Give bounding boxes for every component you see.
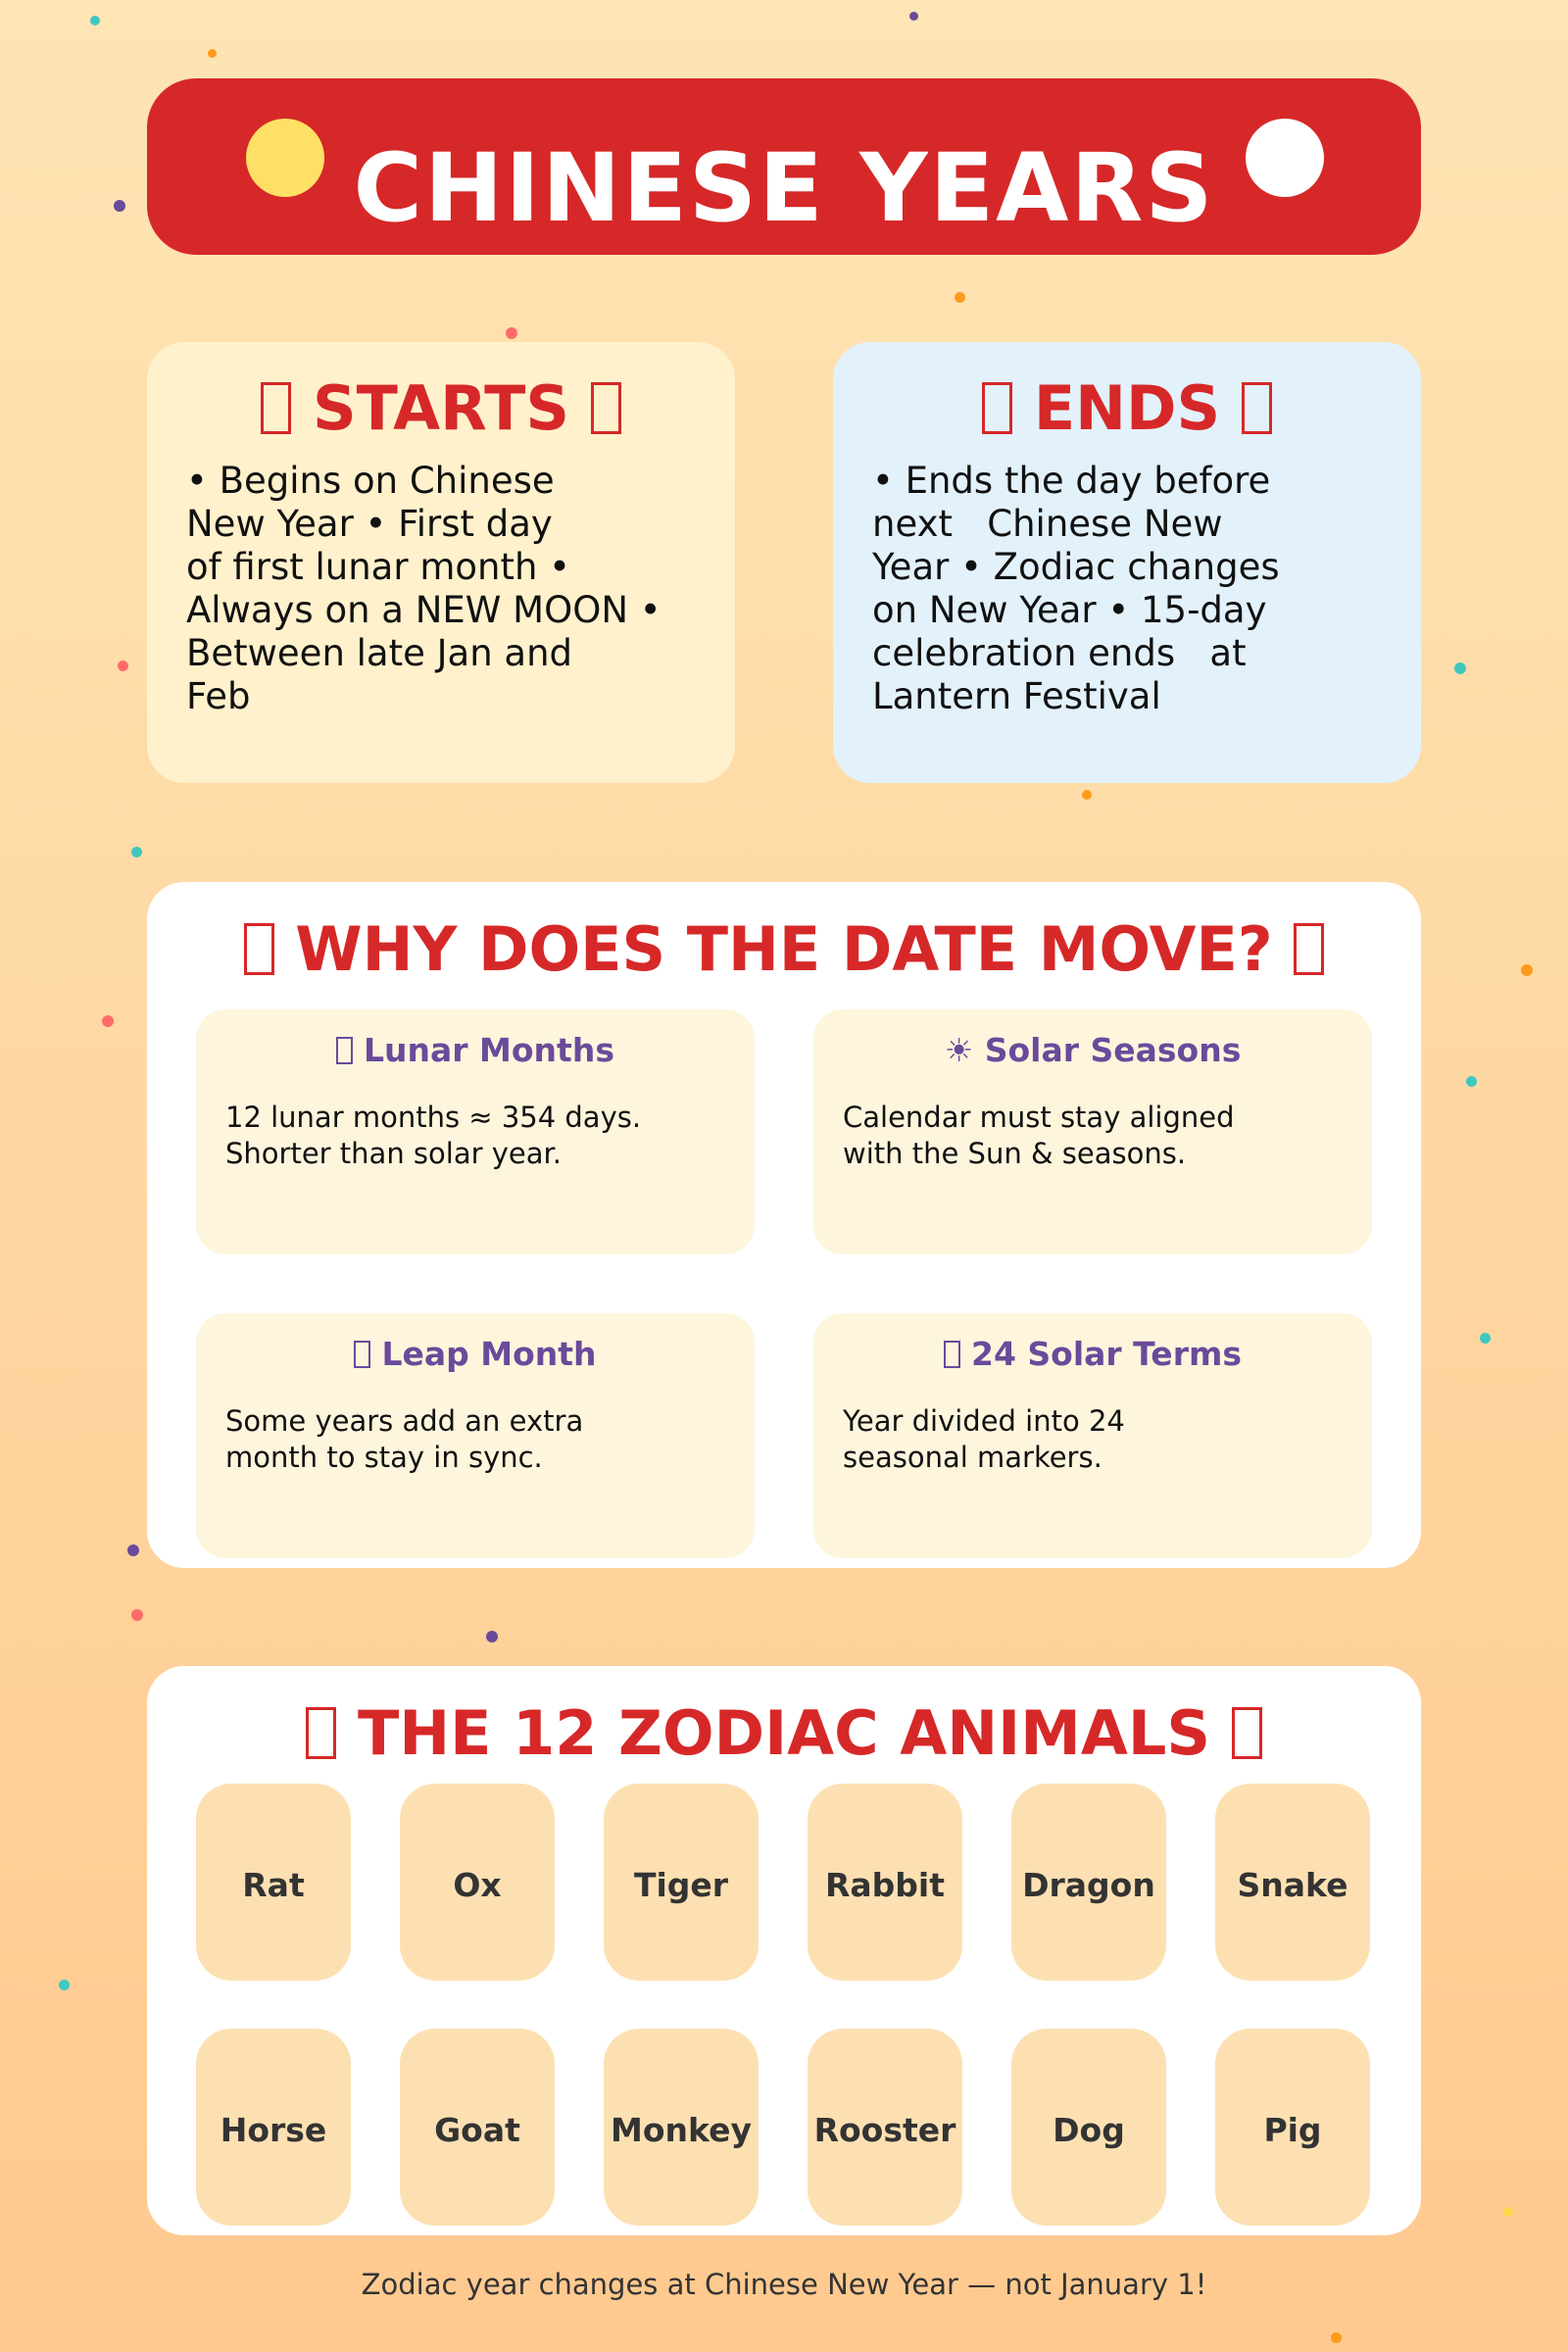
tiles: [196, 1784, 1370, 2226]
text: starts: Always on a NEW MOON •: [186, 589, 662, 631]
panel: zodiac animals: Rooster: [814, 2111, 956, 2149]
panel: zodiac animals: [147, 1666, 1421, 2235]
heading: ends: ENDS: [1034, 372, 1220, 444]
card: lunar months: Shorter than solar year.: [225, 1137, 562, 1170]
title banner: [147, 78, 1421, 255]
card: lunar months: [196, 1009, 755, 1254]
panel: ends: [833, 342, 1421, 783]
panel: zodiac animals: Dragon: [1022, 1866, 1155, 1904]
card: 24 solar terms: 24 Solar Terms: [971, 1335, 1242, 1373]
panel: zodiac animals: Rat: [242, 1866, 305, 1904]
heading: starts: STARTS: [313, 372, 569, 444]
card: 24 solar terms: Year divided into 24: [843, 1404, 1125, 1438]
text: starts: Feb: [186, 675, 251, 717]
panel: zodiac animals: Rabbit: [825, 1866, 945, 1904]
heading: ends: [982, 372, 1272, 444]
panel: zodiac animals: Snake: [1237, 1866, 1348, 1904]
text: starts: Between late Jan and: [186, 632, 572, 674]
text: ends: next Chinese New: [872, 503, 1223, 545]
card: leap month: [196, 1313, 755, 1558]
panel: starts: [147, 342, 735, 783]
text: starts: New Year • First day: [186, 503, 553, 545]
text: ends: on New Year • 15-day: [872, 589, 1266, 631]
text: ends: • Ends the day before: [872, 460, 1270, 502]
text: ends: celebration ends at: [872, 632, 1247, 674]
panel: zodiac animals: Dog: [1053, 2111, 1125, 2149]
panel: zodiac animals: Tiger: [634, 1866, 728, 1904]
panel: zodiac animals: Goat: [434, 2111, 520, 2149]
panel: zodiac animals: Horse: [220, 2111, 326, 2149]
panel: zodiac animals: Monkey: [611, 2111, 752, 2149]
heading: why: WHY DOES THE DATE MOVE?: [295, 913, 1273, 985]
panel: zodiac animals: Ox: [453, 1866, 502, 1904]
card: solar seasons: Calendar must stay aligned: [843, 1101, 1235, 1134]
text: starts: [186, 460, 662, 717]
panel: why does the date move: [147, 882, 1421, 1568]
title text: CHINESE YEARS: [353, 133, 1215, 243]
text: ends: Lantern Festival: [872, 675, 1161, 717]
footer note: Zodiac year changes at Chinese New Year — not January 1!: [362, 2268, 1206, 2301]
card: lunar months: Lunar Months: [364, 1031, 614, 1069]
text: starts: • Begins on Chinese: [186, 460, 555, 502]
card: lunar months: 12 lunar months ≈ 354 days.: [225, 1101, 641, 1134]
icon: white moon: [1246, 119, 1324, 197]
heading: zodiac: THE 12 ZODIAC ANIMALS: [358, 1697, 1210, 1769]
text: ends: Year • Zodiac changes: [872, 546, 1280, 588]
card: 24 solar terms: seasonal markers.: [843, 1441, 1102, 1474]
card: leap month: month to stay in sync.: [225, 1441, 543, 1474]
card: solar seasons: with the Sun & seasons.: [843, 1137, 1186, 1170]
icon: yellow sun: [246, 119, 324, 197]
card: 24 solar terms: [813, 1313, 1372, 1558]
text: ends: [872, 460, 1280, 717]
card: solar seasons: [813, 1009, 1372, 1254]
card: leap month: Some years add an extra: [225, 1404, 583, 1438]
card: solar seasons: ☀ Solar Seasons: [945, 1031, 1241, 1069]
card: leap month: Leap Month: [381, 1335, 597, 1373]
panel: zodiac animals: Pig: [1263, 2111, 1322, 2149]
text: starts: of first lunar month •: [186, 546, 570, 588]
